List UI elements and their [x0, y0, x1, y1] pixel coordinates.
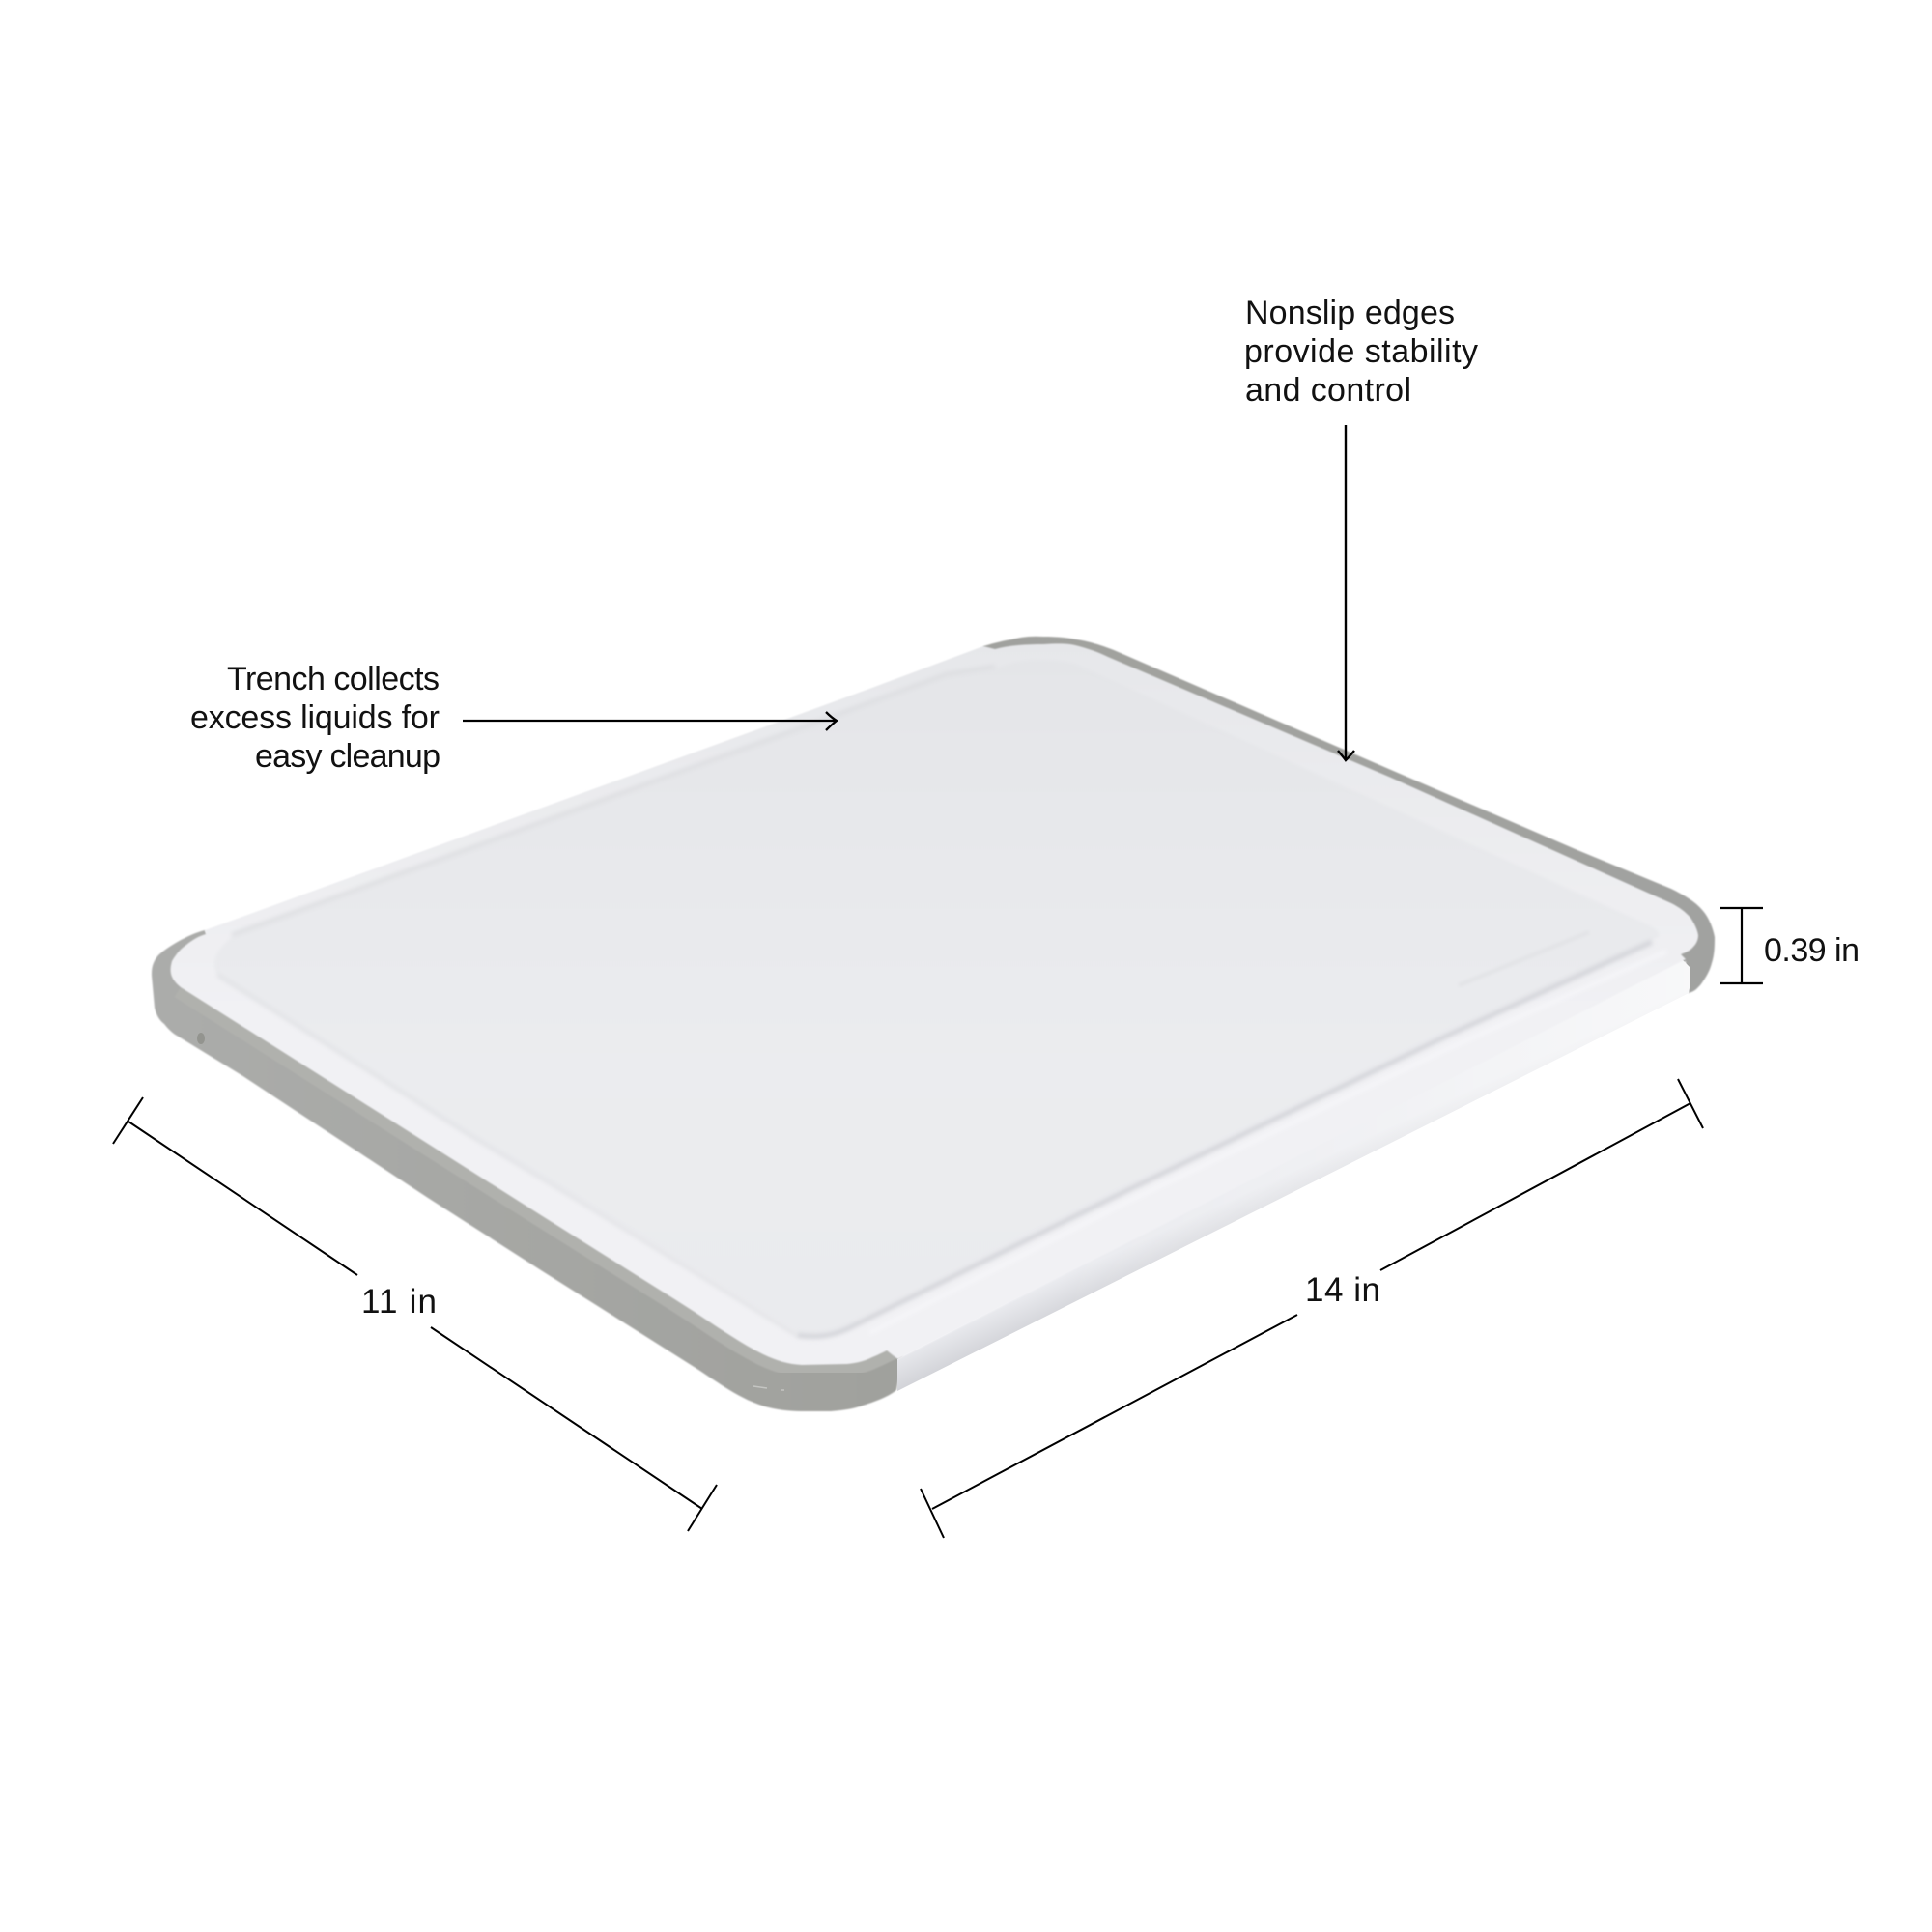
callout text: nonslip: Nonslip edges	[1245, 295, 1455, 331]
board gray nonslip rim	[152, 637, 1715, 1411]
board front face	[897, 958, 1690, 1391]
dimension lines: 14 in	[921, 1079, 1703, 1538]
dimension: height	[1720, 908, 1860, 983]
arrow: nonslip	[1338, 425, 1354, 760]
raised cutting plateau	[214, 660, 1660, 1334]
callout text: trench	[190, 661, 440, 775]
dimension: length 14 in	[921, 1079, 1703, 1538]
label: height: 0.39 in	[1764, 932, 1860, 969]
callout text: trench: Trench collects	[227, 661, 440, 697]
callout text: nonslip	[1244, 295, 1478, 409]
trench line: front	[797, 942, 1652, 1336]
rim light top band	[181, 987, 891, 1365]
rim peg	[197, 1033, 205, 1044]
callout text: trench: easy cleanup	[255, 738, 440, 775]
board top surface	[171, 643, 1698, 1365]
bracket: height	[1720, 908, 1763, 983]
rim wear marks	[753, 1386, 784, 1390]
label: 14 in: 14 in	[1305, 1271, 1380, 1309]
callout text: nonslip: and control	[1245, 372, 1411, 409]
trench line: back left	[232, 667, 995, 935]
dimension lines: 11 in	[113, 1097, 717, 1531]
arrow: trench	[463, 712, 837, 730]
callout text: nonslip: provide stability	[1244, 333, 1478, 370]
dimension: width 11 in	[113, 1097, 717, 1531]
label: 11 in: 11 in	[361, 1283, 437, 1321]
callout: nonslip edges	[1244, 295, 1478, 760]
callout: trench	[190, 661, 837, 775]
callout text: trench: excess liquids for	[190, 699, 440, 736]
cutting board photo	[152, 637, 1715, 1411]
front face light falloff	[897, 958, 1690, 1391]
ridge highlight	[869, 952, 1666, 1333]
embossed logo	[1459, 932, 1589, 985]
trench line: left	[217, 975, 797, 1335]
